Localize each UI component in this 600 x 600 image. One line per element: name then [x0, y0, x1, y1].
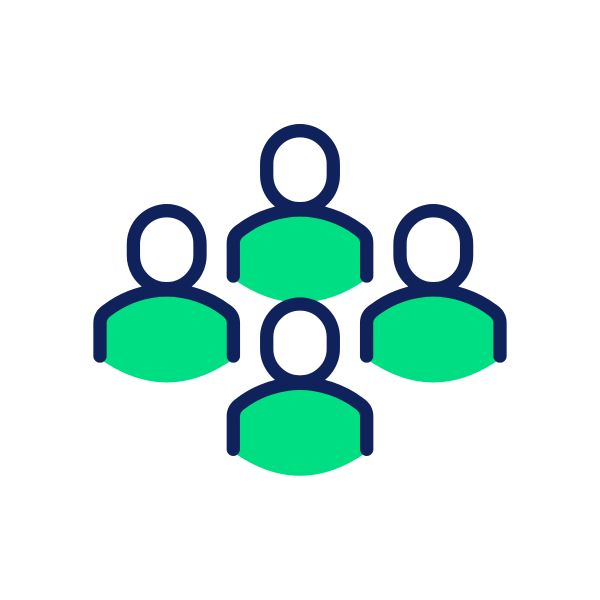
person: top centre	[233, 131, 367, 302]
person: right	[367, 211, 500, 382]
person: bottom centre	[233, 304, 367, 476]
person: left	[100, 211, 233, 382]
